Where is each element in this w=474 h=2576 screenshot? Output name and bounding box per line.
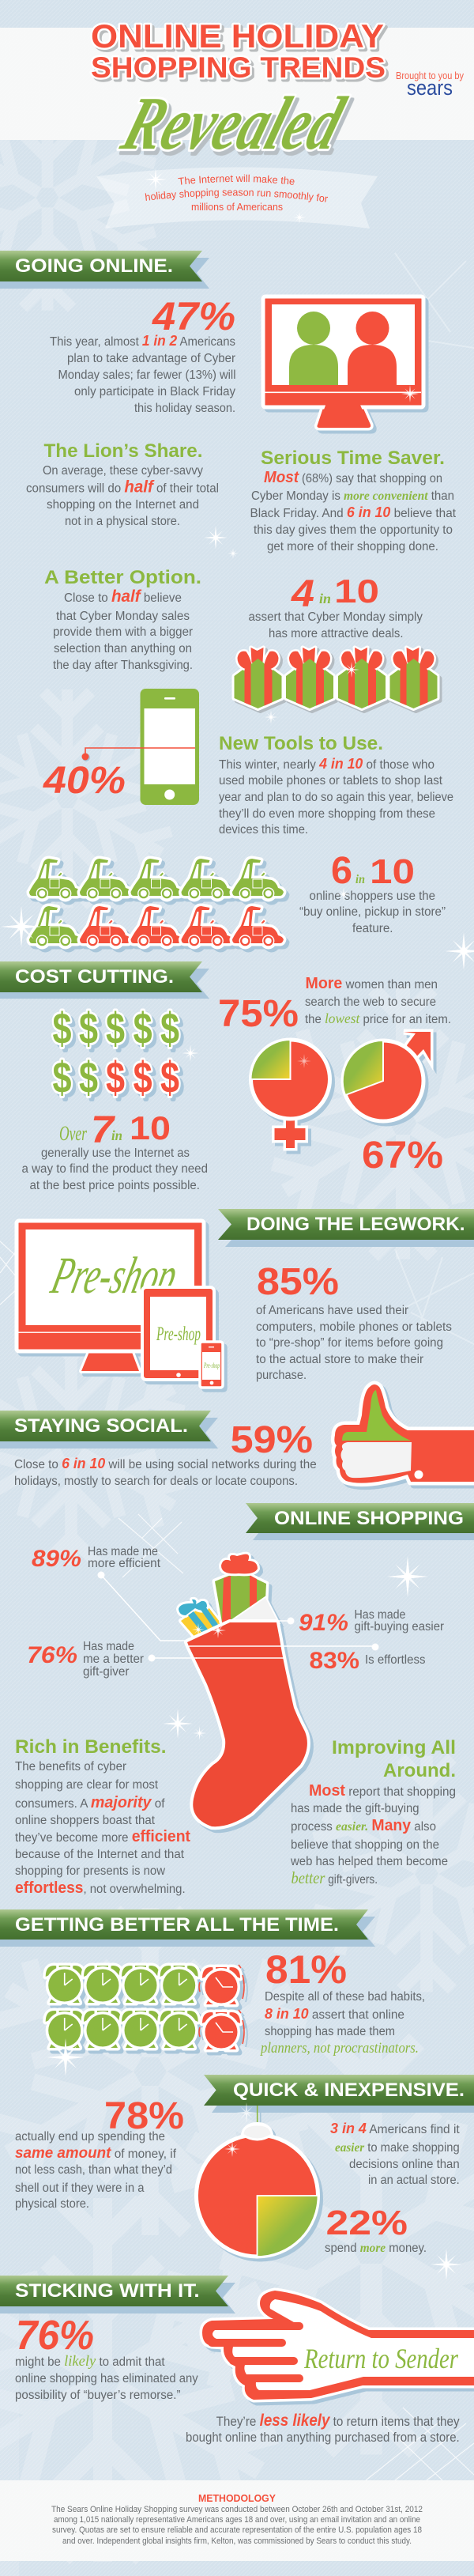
stat: over 7 in 10: Over	[59, 1122, 88, 1145]
icon: blue and yellow gift	[179, 1600, 225, 1639]
text: the lion's share: The Lion’s Share.	[44, 440, 202, 462]
stat: 47%: 47%	[152, 294, 235, 338]
stat: 75%: the lowest price for an item.	[305, 1010, 451, 1026]
stat: 78%	[15, 2095, 184, 2211]
text: rich in benefits: The benefits of cyber	[15, 1760, 126, 1773]
text: less likely: They’re less likely to return items that they	[216, 2412, 460, 2430]
text: serious time saver	[250, 448, 457, 553]
title: ONLINE HOLIDAY	[91, 17, 384, 55]
stat: 78%: not less cash, than what they’d	[15, 2163, 172, 2177]
text: rich in benefits: because of the Internet and that	[15, 1848, 185, 1861]
text: a better option: provide them with a bigger	[53, 625, 193, 639]
text: new tools to use: year and plan to do so again this year, believe	[219, 791, 453, 804]
stat: 85%: to the actual store to make their	[256, 1353, 423, 1366]
ribbon: cost cutting: COST CUTTING.	[15, 966, 174, 988]
text: rich in benefits: they’ve become more efficient	[15, 1828, 190, 1845]
callout: 76% better gift-giver: me a better	[83, 1652, 144, 1666]
intro banner	[96, 168, 378, 229]
ribbon: cost cutting	[0, 961, 209, 999]
intro banner: holiday shopping season run smoothly for	[145, 188, 329, 202]
stat: 6 in 10: online shoppers use the	[310, 890, 435, 903]
text: a better option: that Cyber Monday sales	[56, 610, 190, 623]
text: new tools to use: New Tools to Use.	[219, 733, 383, 754]
stat: 75%: More women than men	[305, 975, 438, 992]
callout: 76% better gift-giver: 76%	[27, 1642, 77, 1668]
icon: tablet	[142, 1287, 214, 1380]
text: serious time saver: Most (68%) say that shopping on	[264, 469, 442, 486]
stat: 81%	[259, 1947, 425, 2057]
icon: ten dollar signs: $	[160, 1003, 179, 1053]
stat: 76%	[15, 2313, 198, 2402]
stat: 76%: might be likely to admit that	[15, 2353, 165, 2370]
section: staying social	[0, 1384, 474, 1488]
stat: 47%: only participate in Black Friday	[74, 385, 235, 398]
stat: 4 in 10: 10	[334, 572, 379, 610]
stat: 59%: Close to 6 in 10 will be using social networks during the	[14, 1456, 317, 1471]
text: the lion's share	[26, 440, 219, 528]
sponsor: Sears: Brought to you by	[396, 70, 464, 81]
stat: 76%: 76%	[16, 2313, 94, 2359]
stat: 76%: online shopping has eliminated any	[15, 2372, 198, 2385]
sparkles	[1, 906, 474, 1062]
methodology: The Sears Online Holiday Shopping survey was conducted between October 26th and October 31st, 2012	[51, 2505, 423, 2514]
section: getting better all the time	[0, 1909, 425, 2076]
stat: 78%: same amount of money, if	[15, 2145, 177, 2162]
icon: large monitor: Pre-shop	[46, 1247, 182, 1305]
text: improving all around: web has helped them become	[290, 1855, 448, 1868]
section: cost cutting	[0, 961, 451, 1192]
stat: 85%: to “pre-shop” for items before going	[256, 1336, 443, 1350]
icon: phone: Pre-shop	[203, 1362, 220, 1369]
ribbon: online shopping: ONLINE SHOPPING	[274, 1508, 464, 1529]
icon: ten dollar signs: $	[79, 1052, 98, 1102]
text: a better option: the day after Thanksgiving.	[53, 659, 193, 672]
text: serious time saver: Cyber Monday is more convenient than	[251, 489, 454, 503]
stat: 47%: plan to take advantage of Cyber	[67, 352, 235, 365]
stat: 22%: spend more money.	[325, 2242, 427, 2255]
stat: 47%	[50, 294, 235, 415]
text: a better option	[44, 567, 201, 672]
stat: 75%: 75%	[218, 993, 299, 1035]
text: the lion's share: consumers will do half of their total	[26, 478, 219, 497]
stat: 47%: this holiday season.	[134, 402, 235, 415]
stat: 85%: computers, mobile phones or tablets	[256, 1320, 452, 1334]
text: 3 in 4: 3 in 4 Americans find it	[330, 2121, 460, 2136]
stat: 6 in 10: in	[356, 873, 365, 886]
icon: green gift	[215, 1554, 266, 1622]
stat: 4 in 10: assert that Cyber Monday simply	[248, 610, 423, 624]
stat: 78%: 78%	[104, 2095, 184, 2137]
sparkle	[47, 2038, 85, 2076]
text: 3 in 4: decisions online than	[349, 2158, 460, 2171]
icon: large monitor	[17, 1221, 204, 1371]
stat: 85%: of Americans have used their	[256, 1304, 408, 1317]
text: new tools to use: used mobile phones or tablets to shop last	[219, 774, 443, 788]
text: improving all around: has made the gift-buying	[291, 1802, 419, 1815]
ribbon: sticking with it	[0, 2276, 235, 2313]
text: a better option: A Better Option.	[44, 567, 201, 588]
text: improving all around: Around.	[383, 1760, 456, 1781]
stat: 4 in 10	[248, 572, 423, 640]
text: the lion's share: On average, these cyber-savvy	[43, 464, 203, 478]
stat: 81%: 81%	[265, 1947, 347, 1992]
ribbon: staying social: STAYING SOCIAL.	[14, 1415, 188, 1437]
stat: 59%: holidays, mostly to search for deals or locate coupons.	[14, 1475, 298, 1488]
stat: 81%: 8 in 10 assert that online	[265, 2006, 404, 2022]
stat: 67%: 67%	[362, 1135, 443, 1177]
stat: 6 in 10: “buy online, pickup in store”	[299, 905, 446, 919]
stat: 81%: planners, not procrastinators.	[259, 2040, 419, 2057]
text: rich in benefits: effortless, not overwhelming.	[15, 1879, 186, 1897]
intro banner: millions of Americans	[191, 201, 283, 213]
chart: female pie	[251, 1040, 330, 1148]
callout: 91% gift-buying easier: gift-buying easier	[354, 1620, 444, 1634]
stat: 47%: Monday sales; far fewer (13%) will	[58, 368, 235, 382]
stat: over 7 in 10: generally use the Internet as	[41, 1146, 190, 1160]
section: online shopping	[15, 1503, 474, 1897]
ribbon: doing the legwork: DOING THE LEGWORK.	[246, 1214, 465, 1235]
stat: 6 in 10	[299, 850, 446, 935]
stat: over 7 in 10: a way to find the product they need	[22, 1162, 208, 1176]
stat: 40%: 40%	[43, 760, 126, 802]
stat: 85%	[256, 1261, 452, 1382]
text: the lion's share: shopping on the Internet and	[47, 498, 199, 512]
ribbon: quick and inexpensive: QUICK & INEXPENSIVE.	[233, 2079, 465, 2101]
stat: 85%: purchase.	[256, 1369, 307, 1382]
stat: 6 in 10: feature.	[352, 922, 393, 935]
text: new tools to use	[219, 733, 453, 837]
stat: 78%: actually end up spending the	[15, 2130, 165, 2144]
ribbon: online shopping	[246, 1503, 474, 1540]
methodology	[51, 2492, 423, 2546]
intro banner: The Internet will make the	[178, 174, 294, 185]
icon: ten dollar signs: $	[134, 1003, 152, 1053]
sparkles on gifts	[163, 1556, 428, 1740]
stat: 22%	[325, 2204, 427, 2255]
stat: over 7 in 10: in	[111, 1127, 122, 1143]
text: rich in benefits: shopping are clear for most	[15, 1778, 159, 1792]
callout: 89% more efficient: more efficient	[88, 1557, 161, 1570]
callout: 83% effortless	[281, 1643, 426, 1674]
ribbon: doing the legwork	[218, 1209, 474, 1247]
callout: 91% gift-buying easier: 91%	[299, 1610, 348, 1636]
sponsor: Sears	[396, 70, 464, 100]
stat: 59%	[14, 1419, 317, 1488]
text: improving all around: Most report that shopping	[309, 1782, 456, 1800]
stat: over 7 in 10	[22, 1109, 208, 1192]
sparkles on ornament	[224, 2102, 257, 2157]
stat: 75%	[218, 975, 451, 1035]
callout: 76% better gift-giver: gift-giver	[83, 1665, 130, 1679]
icon: tablet: Pre-shop	[156, 1324, 201, 1345]
title: SHOPPING TRENDS	[91, 51, 386, 84]
text: rich in benefits: Rich in Benefits.	[15, 1736, 166, 1758]
callout: 91% gift-buying easier: Has made	[354, 1608, 406, 1622]
icon: ten cars	[29, 859, 284, 946]
text: rich in benefits: shopping for presents is now	[15, 1864, 166, 1878]
icon: ten dollar signs: $	[52, 1052, 71, 1102]
text: new tools to use: devices this time.	[219, 823, 308, 837]
section: sticking with it	[0, 2276, 474, 2445]
icon: desktop, tablet and phone	[17, 1221, 223, 1388]
text: less likely	[186, 2412, 460, 2445]
section: going online	[0, 251, 457, 946]
icon: ten dollar signs: $	[106, 1003, 125, 1053]
callout: 83% effortless: Is effortless	[365, 1653, 426, 1667]
stat: over 7 in 10: 7	[91, 1109, 115, 1151]
icon: stocking with gifts	[179, 1554, 307, 1826]
stat: 85%: 85%	[257, 1261, 339, 1303]
text: 3 in 4: easier to make shopping	[335, 2141, 460, 2155]
stat: 4 in 10: in	[319, 591, 331, 606]
ribbon: staying social	[0, 1411, 218, 1449]
icon: ten dollar signs	[52, 1003, 179, 1102]
callout: 89% more efficient: 89%	[32, 1546, 81, 1572]
methodology: among 1,015 nationally representative Americans ages 18 and over, using an email invitation and an online	[54, 2515, 420, 2525]
ribbon: going online: GOING ONLINE.	[15, 255, 173, 277]
stat: over 7 in 10: 10	[130, 1109, 171, 1146]
icon: smartphone with 40% line	[82, 689, 199, 805]
icon: ten dollar signs: $	[160, 1052, 179, 1102]
section: doing the legwork	[17, 1209, 474, 1388]
methodology: and over. Independent global insights firm, Kelton, was commissioned by Sears to conduct this study.	[62, 2536, 412, 2546]
text: improving all around: better gift-givers.	[291, 1868, 378, 1887]
sponsor: Sears: sears	[407, 76, 453, 100]
sparkles	[204, 526, 359, 724]
text: new tools to use: they’ll do even more shopping from these	[219, 807, 435, 821]
ribbon: getting better	[0, 1909, 375, 1947]
methodology: METHODOLOGY	[198, 2492, 276, 2504]
title	[91, 17, 386, 165]
stat: 6 in 10: 10	[370, 852, 415, 891]
methodology: survey. Quotas are set to ensure reliable and accurate representation of the entire U.S. population ages 18	[52, 2525, 422, 2535]
icon: ten dollar signs: $	[106, 1052, 125, 1102]
text: the lion's share: not in a physical store.	[65, 515, 180, 528]
ribbon: going online	[0, 251, 209, 289]
icon: ten dollar signs: $	[52, 1003, 71, 1053]
section: quick and inexpensive	[15, 2075, 474, 2280]
ribbon: quick and inexpensive	[204, 2075, 474, 2113]
text: a better option: selection than anything on	[54, 642, 192, 655]
text: serious time saver: Black Friday. And 6 in 10 believe that	[250, 504, 457, 520]
title: Revealed	[112, 81, 355, 165]
text: rich in benefits	[15, 1736, 190, 1897]
stat: 22%: 22%	[325, 2204, 408, 2242]
stat: 47%: This year, almost 1 in 2 Americans	[50, 333, 235, 349]
icon: stocking	[187, 1598, 307, 1826]
icon: four gift boxes	[234, 648, 438, 708]
icon: phone	[200, 1342, 223, 1388]
stat: 81%: Despite all of these bad habits,	[265, 1990, 425, 2004]
stat: 4 in 10: 4	[291, 573, 314, 615]
callout: 76% better gift-giver	[27, 1640, 197, 1679]
sparkle	[431, 2249, 462, 2280]
stat: 76%: possibility of “buyer’s remorse.”	[15, 2389, 180, 2402]
text: improving all around: Improving All	[332, 1737, 456, 1758]
text: serious time saver: get more of their shopping done.	[267, 540, 438, 553]
callout: 89% more efficient	[32, 1545, 187, 1641]
icon: ten dollar signs: $	[79, 1003, 98, 1053]
callout: 76% better gift-giver: Has made	[83, 1640, 134, 1653]
text: rich in benefits: online shoppers boast that	[15, 1814, 156, 1827]
text: improving all around: process easier. Many also	[291, 1817, 436, 1834]
icon: ten alarm clocks	[46, 1965, 244, 2049]
text: 3 in 4	[330, 2121, 460, 2187]
text: new tools to use: This winter, nearly 4 in 10 of those who	[219, 756, 434, 772]
text: rich in benefits: consumers. A majority of	[15, 1794, 165, 1811]
icon: ten dollar signs: $	[134, 1052, 152, 1102]
ribbon: getting better: GETTING BETTER ALL THE TIME.	[15, 1914, 339, 1936]
icon: monitor with two people	[263, 297, 423, 428]
callout: 83% effortless: 83%	[310, 1648, 359, 1674]
stat: 81%: shopping has made them	[265, 2025, 395, 2038]
ribbon: sticking with it: STICKING WITH IT.	[15, 2280, 200, 2302]
stat: 78%: physical store.	[15, 2197, 89, 2211]
stat: 78%: shell out if they were in a	[15, 2181, 145, 2195]
text: improving all around: believe that shopping on the	[291, 1838, 439, 1852]
text: serious time saver: this day gives them the opportunity to	[254, 523, 453, 537]
text: 3 in 4: in an actual store.	[368, 2174, 460, 2187]
stat: 4 in 10: has more attractive deals.	[269, 627, 403, 640]
callout: 91% gift-buying easier	[276, 1608, 444, 1636]
chart: male pie	[343, 1032, 431, 1121]
stat: 75%: search the web to secure	[305, 995, 436, 1009]
stat: 59%: 59%	[231, 1419, 313, 1461]
stat: over 7 in 10: at the best price points possible.	[30, 1179, 200, 1192]
callout: 89% more efficient: Has made me	[88, 1545, 158, 1558]
text: a better option: Close to half believe	[64, 587, 182, 606]
text: serious time saver: Serious Time Saver.	[261, 448, 445, 469]
icon: thumbs up	[334, 1384, 474, 1483]
stat: 6 in 10: 6	[331, 850, 352, 892]
text: improving all around	[290, 1737, 456, 1887]
chart: ornament pie	[196, 2106, 318, 2257]
icon: pointing hand	[202, 2291, 474, 2400]
